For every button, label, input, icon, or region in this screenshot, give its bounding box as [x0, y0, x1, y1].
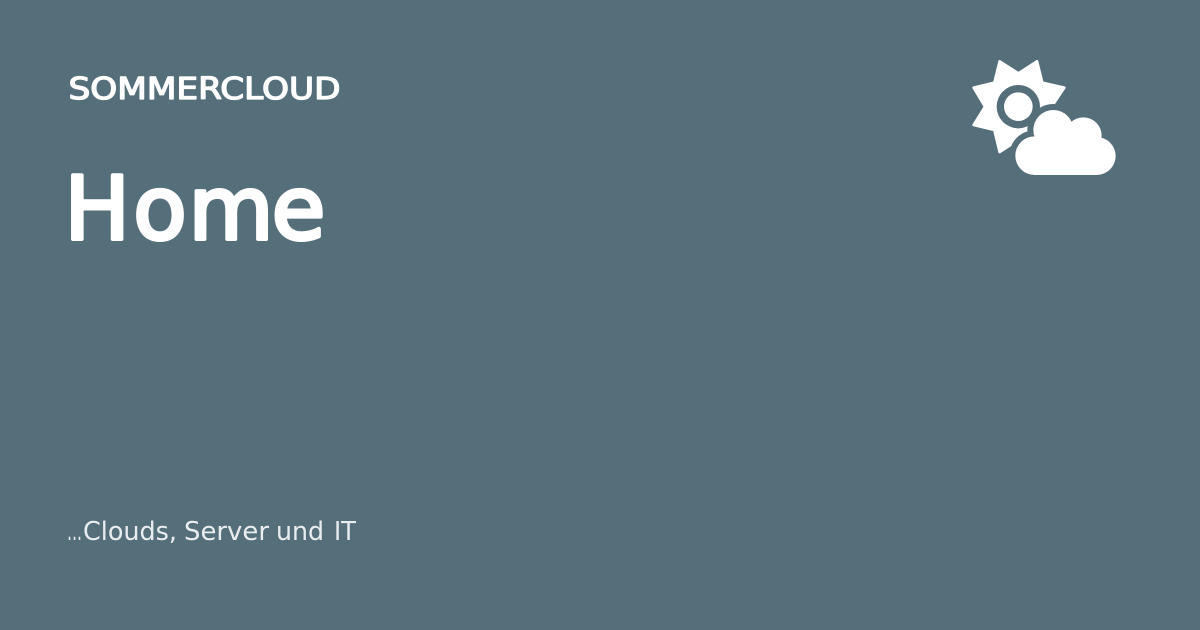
tagline: IT [334, 517, 356, 547]
icon: sun ring [997, 85, 1040, 128]
icon: cloud halo [1009, 104, 1122, 181]
page title: Home [64, 158, 325, 260]
tagline: und [276, 517, 324, 547]
tagline: … [67, 517, 82, 547]
icon: sun rays [974, 61, 1064, 152]
tagline [67, 517, 356, 547]
tagline: Clouds, [83, 517, 177, 547]
icon: sun behind cloud [974, 61, 1122, 181]
site name: SOMMERCLOUD [68, 72, 340, 107]
icon: sun core [1004, 92, 1033, 121]
tagline: Server [184, 517, 269, 547]
icon: cloud [1015, 110, 1116, 175]
